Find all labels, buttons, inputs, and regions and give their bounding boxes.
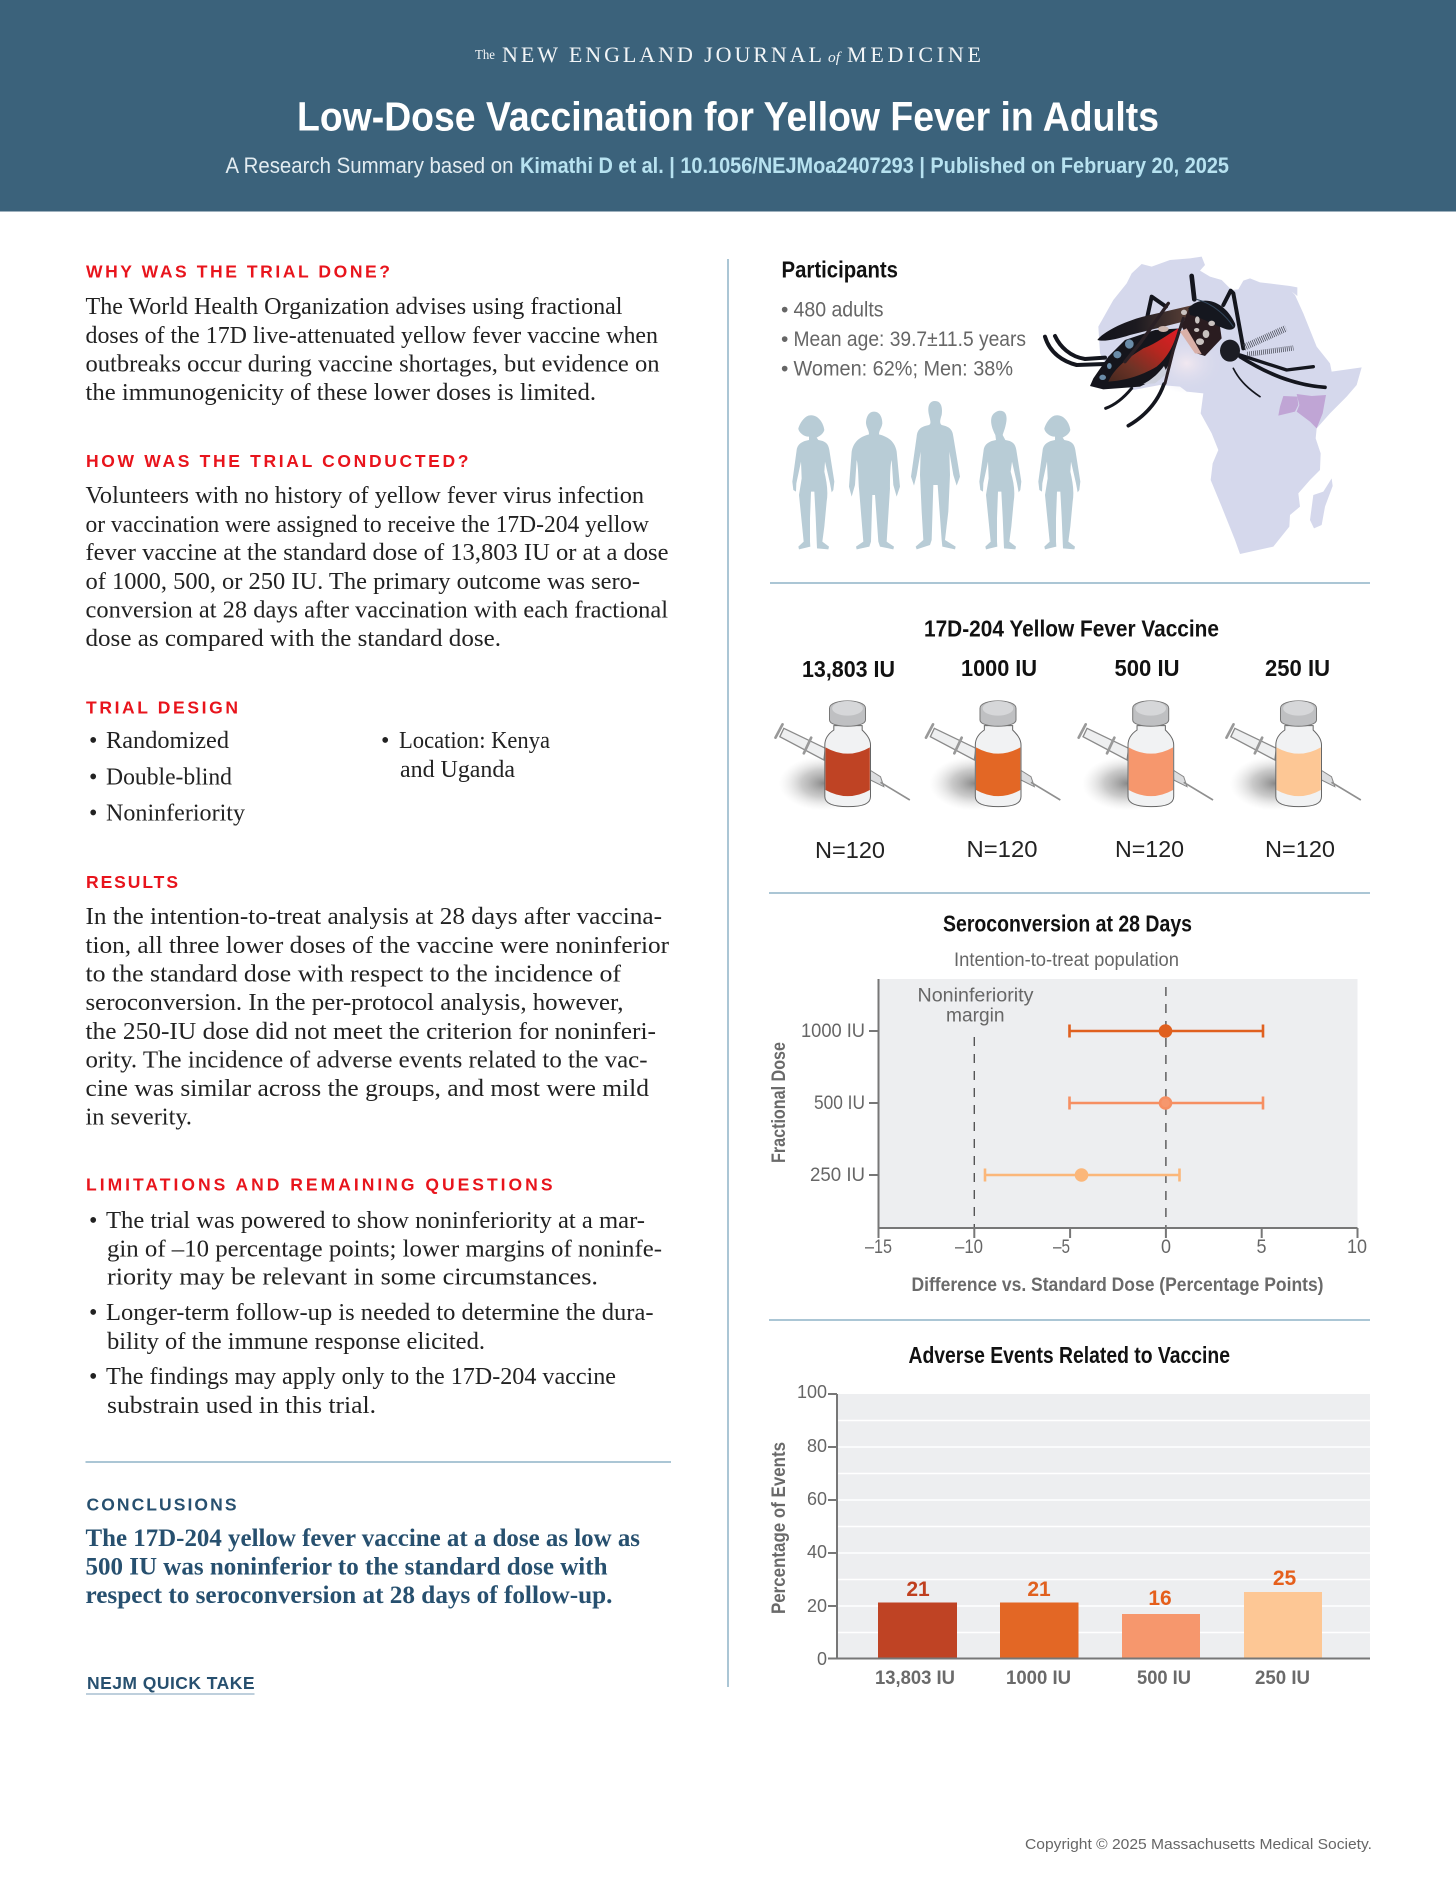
icon: vial and syringe 250 IU [1226, 701, 1361, 811]
icon: person 5 [1038, 415, 1080, 549]
estimate: 500 IU [1070, 1096, 1263, 1110]
category labels: 250 IU [1255, 1668, 1310, 1689]
list: limitations: • [89, 1364, 97, 1390]
y-axis title: fractional dose: Fractional Dose [769, 1042, 790, 1163]
subtitle citation: Kimathi D et al. | 10.1056/NEJMoa2407293 | Published on February 20, 2025 [520, 153, 1229, 178]
text block: results: In the intention-to-treat analysis at 28 days after vaccina- [86, 904, 662, 930]
estimate: 1000 IU [1070, 1024, 1263, 1038]
journal logo: of [828, 50, 842, 66]
list: participant facts: Women: 62%; Men: 38% [794, 358, 1013, 380]
heading: seroconversion: Seroconversion at 28 Days [943, 910, 1192, 936]
text block: conclusions [86, 1523, 640, 1609]
y tick labels: 40 [807, 1542, 827, 1562]
link: NEJM quick take: NEJM QUICK TAKE [87, 1673, 254, 1693]
bar: 250 IU [1244, 1592, 1322, 1658]
axis tick labels: –5 [1053, 1237, 1070, 1258]
y tick labels: 60 [807, 1489, 827, 1509]
category labels [875, 1668, 1310, 1689]
mosquito leg overlays [1125, 303, 1183, 383]
text block: how: dose as compared with the standard dose. [86, 626, 501, 652]
list: limitations: The findings may apply only to the 17D-204 vaccine [106, 1364, 616, 1390]
value labels: 25 [1273, 1567, 1296, 1590]
list: participant facts [781, 298, 1026, 380]
list: limitations: The trial was powered to show noninferiority at a mar- [106, 1208, 645, 1234]
list: limitations: bility of the immune response elicited. [107, 1329, 485, 1355]
list: trial design: Location: Kenya [399, 728, 550, 754]
mosquito abdomen [1090, 328, 1180, 389]
value labels: 21 [1027, 1578, 1051, 1601]
people silhouettes [792, 401, 1080, 549]
dose group: 250 IU [1226, 655, 1361, 862]
icon: vial and syringe 1000 IU [926, 701, 1060, 811]
journal logo: NEW ENGLAND JOURNAL [502, 42, 822, 67]
category labels: 500 IU [1137, 1668, 1191, 1689]
subheading: population: Intention-to-treat population [954, 950, 1179, 971]
category labels: 13,803 IU [875, 1668, 955, 1689]
text block: why [86, 294, 659, 406]
text block: how: fever vaccine at the standard dose of 13,803 IU or at a dose [86, 540, 668, 566]
list: participant facts: • [781, 358, 788, 380]
category labels: 1000 IU [1006, 1668, 1071, 1689]
text block: conclusions: respect to seroconversion at 28 days of follow-up. [86, 1580, 612, 1609]
list: limitations [89, 1208, 662, 1419]
dose group: 500 IU: 500 IU [1114, 655, 1180, 681]
axis tick labels: 0 [1161, 1237, 1171, 1258]
estimate: 250 IU [985, 1168, 1180, 1182]
chart: adverse events bar chart [797, 1382, 1370, 1689]
list: participant facts: 480 adults [794, 298, 884, 322]
noninferiority margin label: Noninferiority [918, 986, 1034, 1006]
text block: results: tion, all three lower doses of the vaccine were noninferior [86, 933, 669, 959]
axis tick labels: 500 IU [814, 1093, 865, 1114]
y tick labels: 0 [817, 1649, 827, 1669]
heading: limitations: LIMITATIONS AND REMAINING QUESTIONS [86, 1174, 552, 1194]
subtitle citation [226, 153, 1229, 178]
list: limitations: riority may be relevant in some circumstances. [107, 1264, 598, 1290]
dose group: 1000 IU: 1000 IU [961, 655, 1037, 681]
value labels: 21 [906, 1578, 930, 1601]
y tick labels: 20 [807, 1596, 827, 1616]
bar: 500 IU [1122, 1614, 1200, 1658]
heading: adverse events: Adverse Events Related to Vaccine [908, 1342, 1230, 1368]
list: trial design: and Uganda [400, 757, 515, 783]
heading: participants: Participants [782, 256, 898, 282]
journal logo [475, 42, 981, 67]
text block: how: conversion at 28 days after vaccination with each fractional [86, 598, 668, 624]
x-axis title: difference: Difference vs. Standard Dose (Percentage Points) [912, 1275, 1324, 1296]
heading: why was the trial done: WHY WAS THE TRIAL DONE? [86, 262, 390, 282]
column divider [727, 259, 729, 1687]
icon: map of Africa [1098, 257, 1362, 554]
list: participant facts: Mean age: 39.7±11.5 years [794, 328, 1026, 351]
bar: 13,803 IU [878, 1602, 957, 1658]
Uganda and Kenya highlight [1278, 394, 1326, 428]
icon: person 4 [979, 411, 1021, 549]
list: trial design: • [89, 800, 97, 826]
subtitle citation: A Research Summary based on [226, 153, 514, 178]
list: limitations: gin of –10 percentage points; lower margins of noninfe- [107, 1236, 662, 1262]
text block: results: to the standard dose with respect to the incidence of [86, 962, 621, 988]
list: trial design: Double-blind [106, 764, 232, 790]
dose group: 13,803 IU [775, 656, 910, 863]
mosquito wing [1097, 305, 1193, 341]
text block: results: ority. The incidence of adverse events related to the vac- [86, 1048, 648, 1074]
dose group: 500 IU [1079, 655, 1213, 862]
text block: why: the immunogenicity of these lower doses is limited. [86, 380, 596, 406]
dose group: 250 IU: 250 IU [1265, 655, 1330, 681]
list: trial design: • [89, 728, 97, 754]
text block: results: cine was similar across the groups, and most were mild [86, 1076, 649, 1102]
mosquito head [1220, 340, 1240, 362]
icon: person 2 [849, 412, 900, 549]
icon: mosquito [1045, 276, 1325, 426]
dose group: 1000 IU: N=120 [966, 836, 1038, 862]
copyright: Copyright © 2025 Massachusetts Medical Society. [1025, 1836, 1372, 1853]
header banner [0, 0, 1456, 212]
axis tick labels: –15 [865, 1237, 892, 1258]
heading: vaccine: 17D-204 Yellow Fever Vaccine [924, 616, 1219, 642]
text block: conclusions: The 17D-204 yellow fever vaccine at a dose as low as [86, 1523, 640, 1552]
title: Low-Dose Vaccination for Yellow Fever in Adults [297, 94, 1159, 140]
text block: why: doses of the 17D live-attenuated yellow fever vaccine when [86, 323, 658, 349]
icon: person 1 [792, 415, 834, 549]
icon: vial and syringe 13,803 IU [775, 701, 910, 811]
value labels [906, 1567, 1296, 1610]
axis tick labels: –10 [955, 1237, 983, 1258]
list: limitations: Longer-term follow-up is needed to determine the dura- [106, 1300, 654, 1326]
y tick labels [797, 1382, 827, 1669]
icon: vial and syringe 500 IU [1079, 701, 1213, 811]
text block: results [86, 904, 669, 1130]
value labels: 16 [1148, 1587, 1172, 1610]
y tick labels: 80 [807, 1436, 827, 1456]
list: trial design: • [381, 728, 389, 754]
text block: why: outbreaks occur during vaccine shortages, but evidence on [86, 352, 659, 378]
text block: results: seroconversion. In the per-protocol analysis, however, [86, 990, 624, 1016]
icon: person 3 [911, 401, 960, 549]
list: trial design: • [89, 764, 97, 790]
axis tick labels: 5 [1256, 1237, 1266, 1258]
y-axis title: percentage of events: Percentage of Events [769, 1442, 790, 1614]
list: trial design: Randomized [106, 728, 229, 754]
list: limitations: substrain used in this trial. [107, 1393, 376, 1419]
text block: results: the 250-IU dose did not meet the criterion for noninferi- [86, 1019, 656, 1045]
mosquito thorax [1182, 310, 1222, 356]
list: limitations: • [89, 1208, 97, 1234]
list: limitations: • [89, 1300, 97, 1326]
axis tick labels: 1000 IU [801, 1021, 865, 1042]
text block: how: Volunteers with no history of yellow fever virus infection [86, 483, 644, 509]
dose group: 1000 IU [926, 655, 1060, 862]
axis tick labels [801, 1021, 1367, 1258]
heading: trial design: TRIAL DESIGN [86, 698, 238, 718]
dose group: 13,803 IU: N=120 [815, 837, 885, 863]
chart: seroconversion forest plot [801, 979, 1367, 1258]
list: trial design [89, 728, 550, 826]
journal logo: The [475, 48, 495, 63]
text block: how [86, 483, 668, 652]
journal logo: MEDICINE [847, 42, 981, 67]
list: participant facts: • [781, 328, 788, 351]
text block: why: The World Health Organization advises using fractional [86, 294, 623, 320]
bar: 1000 IU [1000, 1602, 1078, 1658]
y tick labels: 100 [797, 1382, 827, 1402]
list: trial design: Noninferiority [106, 800, 245, 826]
heading: conclusions: CONCLUSIONS [86, 1494, 236, 1514]
text block: how: of 1000, 500, or 250 IU. The primary outcome was sero- [86, 569, 640, 595]
axis tick labels: 250 IU [810, 1165, 865, 1186]
heading: results: RESULTS [86, 872, 178, 892]
dose group: 13,803 IU: 13,803 IU [802, 656, 895, 682]
dose group: 250 IU: N=120 [1265, 836, 1335, 862]
axis tick labels: 10 [1347, 1237, 1367, 1258]
noninferiority margin label: margin [946, 1006, 1004, 1026]
text block: how: or vaccination were assigned to receive the 17D-204 yellow [86, 512, 650, 538]
noninferiority margin label [918, 986, 1034, 1026]
heading: how was the trial conducted: HOW WAS THE TRIAL CONDUCTED? [86, 451, 468, 471]
dose group: 500 IU: N=120 [1115, 836, 1184, 862]
text block: results: in severity. [86, 1104, 192, 1130]
text block: conclusions: 500 IU was noninferior to the standard dose with [86, 1552, 608, 1580]
list: participant facts: • [781, 298, 788, 322]
